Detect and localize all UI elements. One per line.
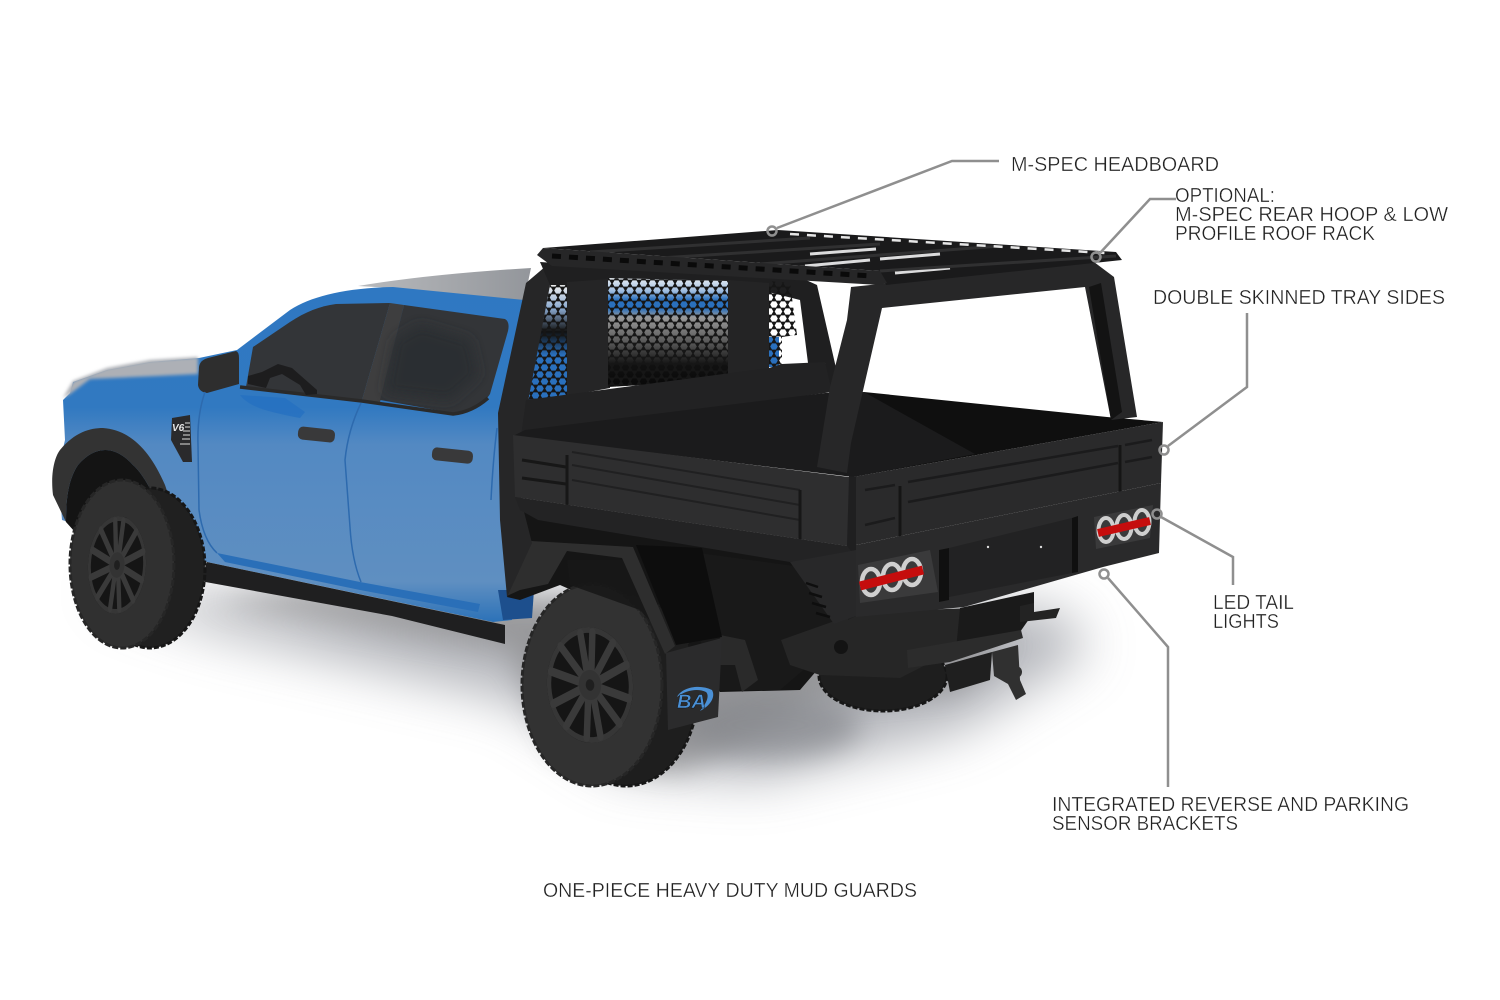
panel: hitch housing — [955, 592, 1034, 660]
panel: door handles — [297, 426, 474, 464]
panel: rack rear rail slots — [790, 234, 1105, 253]
callout: integrated reverse and parking sensor brackets — [1052, 570, 1409, 835]
panel: bonnet highlight — [63, 357, 198, 398]
icon: v6 badge — [171, 415, 192, 462]
callout: optional rear hoop and roof rack — [1092, 185, 1448, 262]
callout: one-piece heavy duty mud guards: ONE-PIECE HEAVY DUTY MUD GUARDS — [543, 880, 917, 902]
panel: window pillar — [362, 303, 404, 402]
truck — [52, 230, 1163, 786]
ground shadow — [90, 590, 1090, 780]
icon: brand logo: BA — [677, 692, 706, 713]
panel: mudguard arch — [507, 541, 675, 654]
panel: tray interior wall — [853, 392, 1163, 477]
panel: door seams — [198, 392, 497, 582]
chart: right mesh — [769, 281, 797, 370]
panel: rack front rail — [537, 248, 887, 285]
panel: number plate recess — [939, 516, 1078, 602]
panel: front wheel arch — [52, 428, 188, 560]
chart: left mesh — [528, 285, 567, 402]
panel: lower door strip — [217, 553, 480, 612]
callout: integrated reverse and parking sensor brackets: INTEGRATED REVERSE AND PARKING — [1052, 794, 1409, 816]
panel: tray floor — [513, 392, 975, 477]
panel: under tray rail — [515, 497, 856, 562]
panel: headboard lower panel — [521, 362, 832, 436]
panel: window sill trim — [240, 387, 488, 414]
callout: optional rear hoop and roof rack: OPTIONAL: — [1175, 185, 1275, 207]
panel: door reflection — [240, 395, 305, 418]
callout: double skinned tray sides — [1153, 287, 1445, 454]
callout: led tail lights — [1152, 510, 1294, 633]
panel: rear tyre — [522, 584, 698, 786]
panel: mud flap with logo — [666, 638, 722, 730]
panel: side mirror — [198, 351, 239, 393]
panel: headboard solid right plate — [728, 280, 769, 379]
chart: centre mesh — [608, 278, 728, 387]
panel: running board — [200, 562, 505, 644]
panel: wheel hiding shade — [567, 560, 668, 640]
panel: rear body blue lower edge — [498, 590, 534, 620]
panel: rear window — [380, 305, 509, 413]
panel: wheel well — [66, 450, 178, 560]
panel: tow bracket — [1020, 603, 1060, 622]
panel: interior mirror stalk — [248, 364, 317, 395]
panel: cab and body in blue — [58, 287, 524, 622]
panel: tray corner edge — [847, 476, 856, 620]
panel: tray right side — [853, 422, 1163, 545]
callout: m-spec headboard: M-SPEC HEADBOARD — [1011, 154, 1219, 176]
panel: upper spare tyre band — [781, 608, 975, 678]
callout: double skinned tray sides: DOUBLE SKINNED TRAY SIDES — [1153, 287, 1445, 309]
icon: tow ball — [992, 645, 1026, 700]
callout: optional rear hoop and roof rack: M-SPEC REAR HOOP & LOW — [1175, 204, 1448, 226]
panel: hoop top beam and legs — [817, 262, 1137, 473]
panel: rear bumper — [856, 483, 1161, 617]
callout: optional rear hoop and roof rack: PROFILE ROOF RACK — [1175, 223, 1376, 245]
panel: left tail light — [858, 550, 938, 603]
panel: under-tray dark filler — [507, 497, 860, 692]
callout: m-spec headboard — [768, 154, 1219, 236]
panel: left corner post of headboard — [498, 266, 552, 597]
panel: window interior — [385, 325, 478, 400]
callout: led tail lights: LED TAIL — [1213, 592, 1294, 614]
panel: headboard top frame — [540, 262, 836, 393]
panel: lower spare tyre — [819, 641, 947, 711]
panel: mudguard upper flap — [636, 545, 722, 645]
panel: chassis and underside — [640, 545, 1060, 711]
panel: tray left side — [513, 435, 856, 550]
panel: headboard solid left plate — [567, 279, 610, 396]
panel: right leg shading — [1089, 283, 1122, 420]
callout: integrated reverse and parking sensor brackets: SENSOR BRACKETS — [1052, 813, 1238, 835]
panel: chassis bracket — [790, 550, 856, 624]
callout: led tail lights: LIGHTS — [1213, 611, 1279, 633]
panel: front window — [246, 303, 390, 400]
panel: front tyre — [70, 480, 205, 648]
panel: hitch receiver — [907, 630, 1023, 668]
panel: roof rack top — [537, 230, 1122, 285]
panel: right tail light — [1094, 505, 1153, 549]
icon: v6 badge: V6 — [172, 423, 185, 434]
panel: roof of cab — [358, 268, 531, 301]
